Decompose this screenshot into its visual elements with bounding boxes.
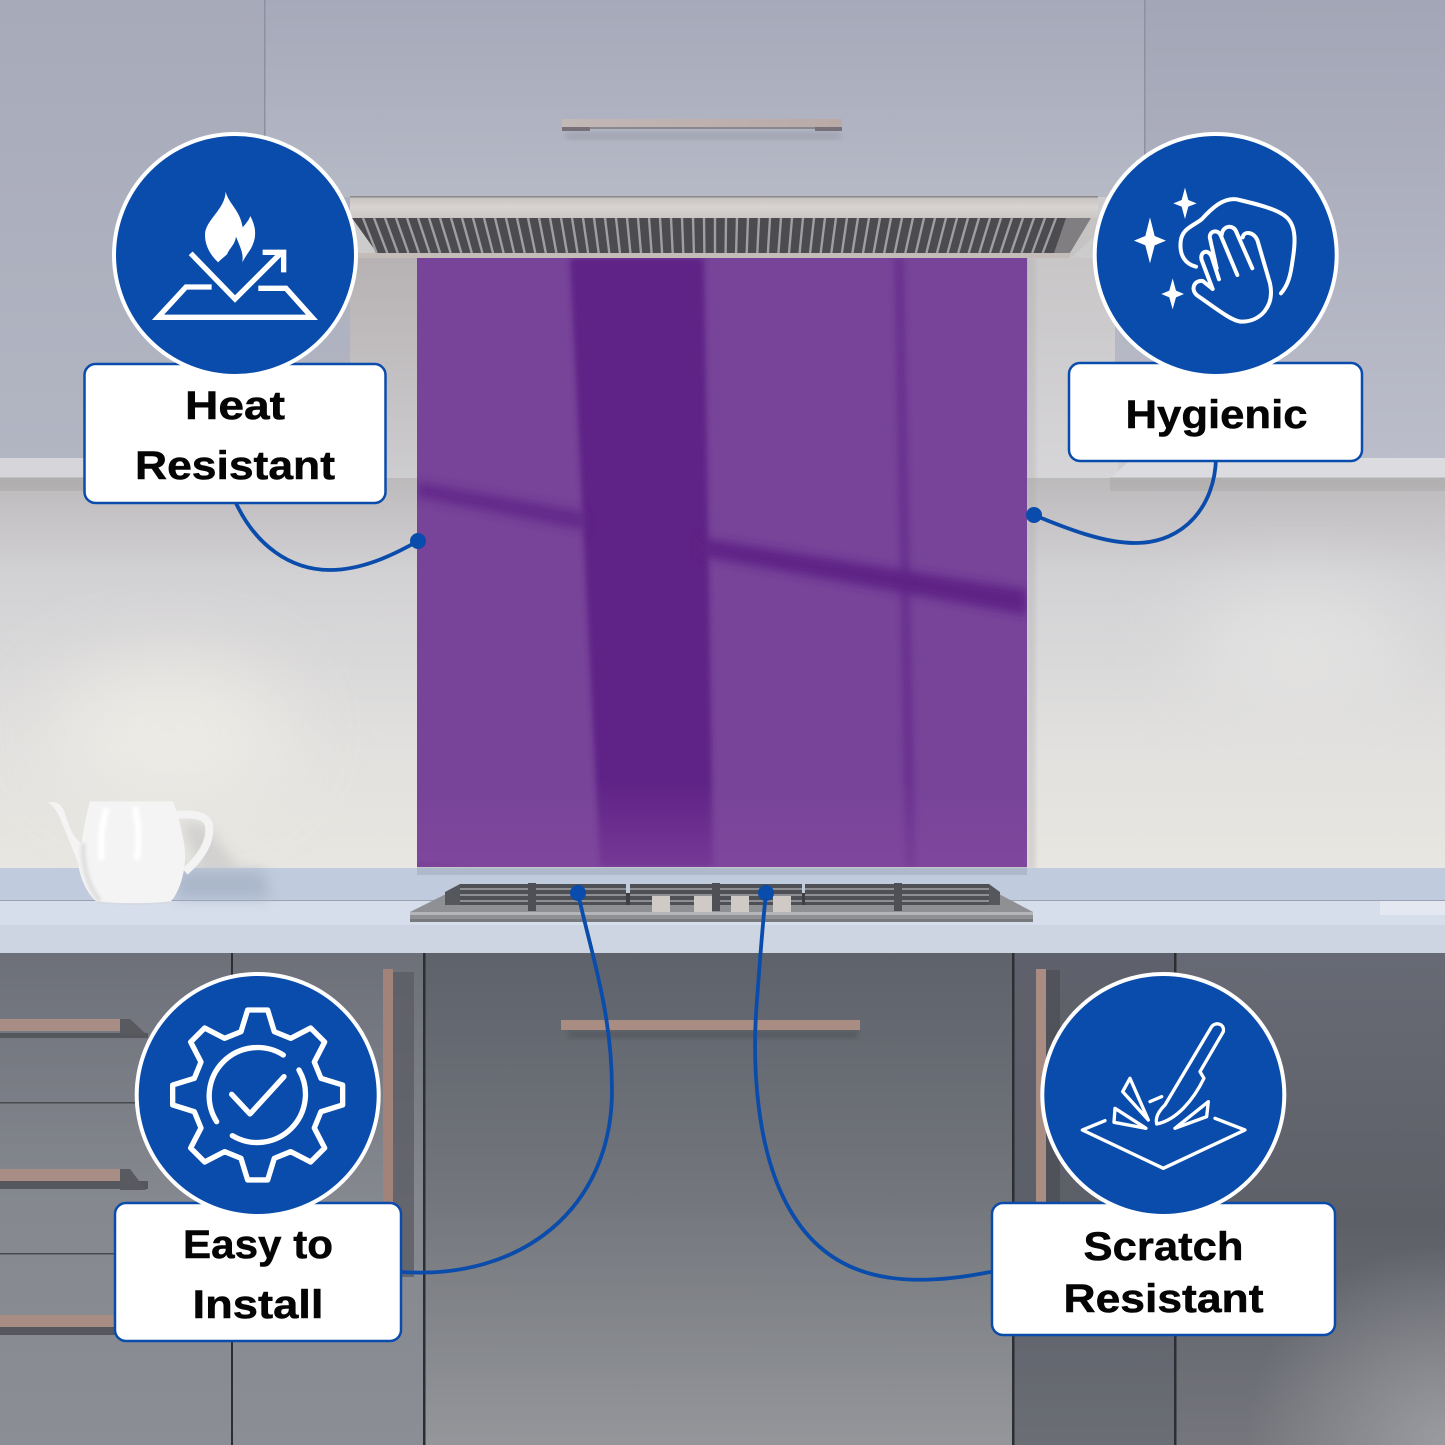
connector line to hob — [402, 885, 612, 1273]
label box: Install — [192, 1283, 324, 1327]
label box — [992, 1203, 1335, 1335]
extractor hood — [350, 196, 1098, 258]
label box — [1069, 363, 1362, 461]
icon badge: flame on surface — [114, 134, 356, 376]
callout: Scratch Resistant — [755, 885, 1335, 1335]
callout: Easy to Install — [115, 885, 612, 1341]
label box: Resistant — [1064, 1277, 1264, 1321]
connector line to panel — [1026, 458, 1216, 543]
purple glass splashback panel — [417, 258, 1027, 867]
counter top — [0, 867, 1445, 953]
label box: Resistant — [135, 444, 335, 488]
window reflection bands — [417, 258, 1027, 867]
icon badge: knife scratching surface — [1042, 974, 1284, 1216]
icon badge: hand wiping with sparkles — [1095, 134, 1337, 376]
connector line to hob — [755, 885, 990, 1280]
wall tiles — [0, 258, 1445, 870]
label box — [115, 1203, 401, 1341]
label box: Easy to — [183, 1223, 333, 1267]
label box: Heat — [185, 384, 285, 428]
gas hob — [410, 883, 1033, 922]
connector line to panel — [235, 501, 426, 570]
base cabinets — [0, 953, 1445, 1445]
upper cabinets — [0, 0, 1445, 491]
teapot — [48, 801, 270, 904]
callout: Heat Resistant — [84, 134, 426, 570]
callout: Hygienic — [1026, 134, 1362, 543]
top cabinet handle — [562, 119, 842, 139]
icon badge: gear with check — [137, 974, 379, 1216]
label box: Hygienic — [1126, 393, 1308, 437]
label box: Scratch — [1084, 1225, 1244, 1269]
label box — [84, 364, 386, 503]
